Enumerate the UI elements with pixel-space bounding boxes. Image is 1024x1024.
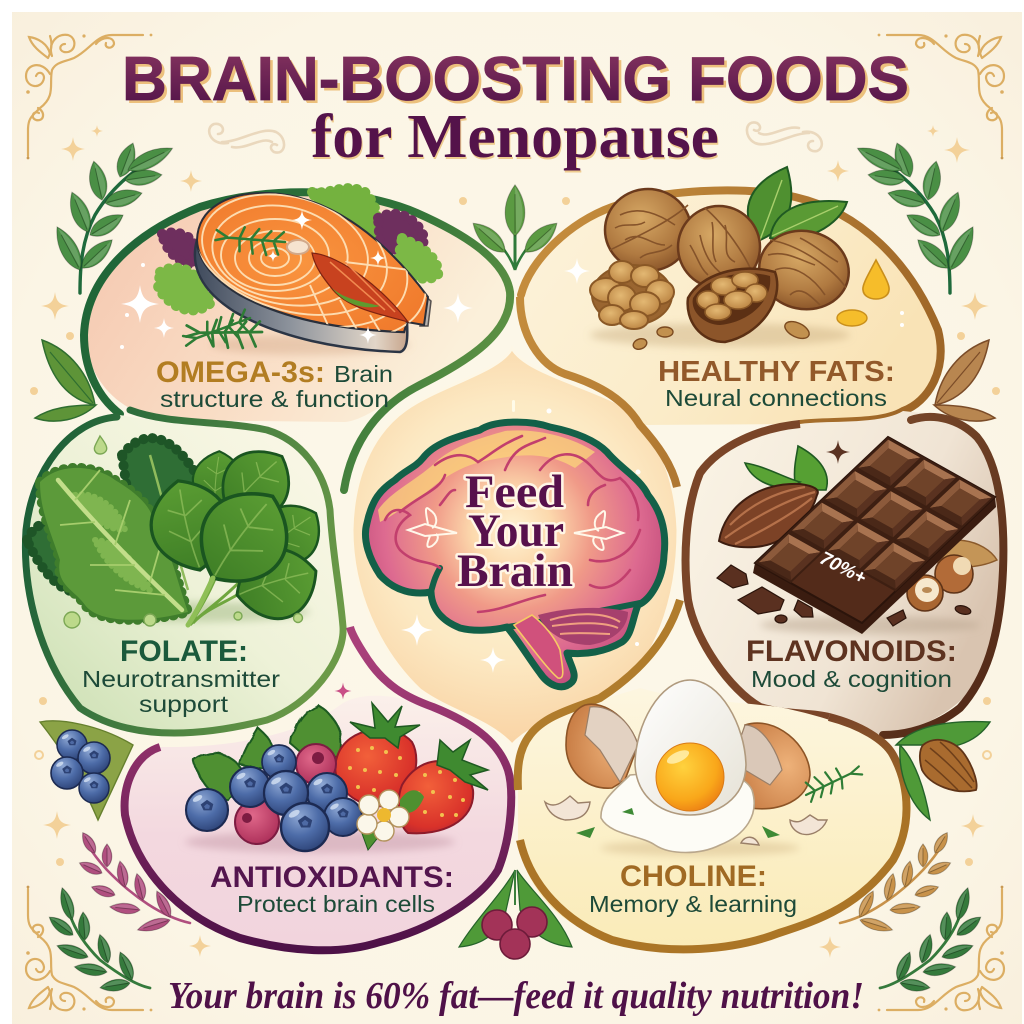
label: antioxidants: Protect brain cells bbox=[237, 891, 435, 917]
brain caption: Brain bbox=[457, 545, 573, 597]
spinach stems bbox=[190, 515, 262, 625]
label: omega-3s: structure & function bbox=[160, 386, 389, 412]
brain caption: Feed bbox=[465, 466, 564, 518]
title: for Menopause bbox=[311, 103, 719, 171]
icon: red berries with leaves bbox=[459, 870, 572, 959]
spinach leaves bbox=[190, 449, 246, 513]
label: flavonoids: FLAVONOIDS: bbox=[746, 635, 957, 668]
kale leaves bbox=[27, 438, 198, 620]
oil drop bbox=[863, 260, 889, 299]
icon: salmon steak bbox=[153, 183, 444, 358]
label: folate: Neurotransmitter bbox=[82, 666, 280, 692]
label: flavonoids bbox=[746, 635, 957, 692]
flourishes bbox=[408, 508, 623, 550]
icon: kale and spinach bbox=[27, 434, 334, 628]
panel: folate bbox=[25, 410, 343, 733]
egg white bbox=[601, 770, 754, 852]
tagline: Your brain is 60% fat—feed it quality nutrition! bbox=[168, 975, 864, 1017]
panel sparkles bbox=[120, 258, 904, 349]
70% label: 70%+ bbox=[816, 548, 869, 589]
pink sparkle bbox=[334, 682, 352, 700]
label: choline bbox=[589, 860, 797, 917]
icon: almond with leaves bbox=[896, 722, 990, 820]
label: omega-3s: OMEGA-3s: bbox=[156, 356, 325, 389]
halved walnut meat bbox=[697, 272, 767, 320]
panel: antioxidants bbox=[125, 627, 511, 950]
blueberries bbox=[186, 745, 362, 851]
herbs bbox=[576, 764, 865, 838]
icon: blueberry cluster bbox=[40, 721, 133, 820]
panel: flavonoids bbox=[686, 411, 1003, 735]
label: antioxidants: ANTIOXIDANTS: bbox=[210, 861, 454, 894]
corner ornament: bottom right bbox=[878, 886, 1004, 1011]
title: BRAIN-BOOSTING FOODS bbox=[125, 48, 912, 117]
brain highlights bbox=[378, 430, 595, 522]
icon: chocolate bar bbox=[717, 437, 997, 634]
label: antioxidants bbox=[210, 861, 454, 917]
right shell bbox=[735, 723, 810, 809]
raspberries bbox=[235, 744, 336, 844]
label: choline: CHOLINE: bbox=[620, 860, 767, 893]
panel: healthy fats bbox=[520, 190, 942, 487]
strawberry leaves bbox=[194, 705, 341, 800]
oil pool bbox=[837, 310, 867, 326]
corner ornament: top left bbox=[26, 34, 152, 159]
crumbs bbox=[632, 318, 812, 351]
water drops bbox=[64, 436, 302, 628]
title: BRAIN-BOOSTING FOODS bbox=[122, 45, 909, 114]
label: healthy fats bbox=[658, 356, 895, 411]
panel: choline bbox=[518, 600, 907, 950]
panel: center brain area bbox=[352, 348, 678, 745]
hazelnuts and leaf bbox=[907, 540, 997, 611]
flower bbox=[357, 790, 424, 850]
title swirl: left bbox=[209, 124, 284, 153]
brain caption: Your bbox=[468, 505, 564, 557]
brain folds bbox=[385, 436, 640, 612]
walnut kernel bbox=[590, 261, 674, 329]
corner ornament: top right bbox=[878, 34, 1004, 159]
label: folate: support bbox=[139, 691, 229, 717]
corner ornament: bottom left bbox=[26, 886, 152, 1011]
icon: walnuts bbox=[590, 167, 889, 351]
brain caption bbox=[457, 466, 573, 597]
label: flavonoids: Mood & cognition bbox=[751, 666, 952, 692]
lobe separation bbox=[431, 568, 640, 627]
label: folate bbox=[82, 635, 280, 717]
yolk bbox=[656, 743, 724, 811]
lettuce garnish bbox=[158, 188, 438, 310]
label: healthy fats: Neural connections bbox=[665, 385, 887, 411]
icon: cracked egg bbox=[545, 680, 865, 856]
chocolate crumbs bbox=[717, 565, 972, 626]
icon: brain bbox=[365, 422, 665, 687]
leaf branches bbox=[35, 140, 995, 993]
green leaves bbox=[748, 167, 847, 240]
shell fragments bbox=[545, 796, 827, 845]
cerebellum bbox=[538, 608, 628, 645]
label: folate: FOLATE: bbox=[120, 635, 248, 668]
label: choline: Memory & learning bbox=[589, 891, 797, 917]
icon: berries bbox=[185, 703, 488, 853]
left shell bbox=[566, 704, 638, 788]
title swirl: right bbox=[747, 122, 822, 151]
chocolate squares bbox=[755, 437, 995, 592]
title: for Menopause bbox=[312, 105, 720, 173]
decorative sparkles bbox=[30, 125, 1000, 958]
brain stem bbox=[514, 615, 563, 678]
cocoa pod bbox=[719, 446, 827, 547]
label: healthy fats: HEALTHY FATS: bbox=[658, 356, 895, 388]
label: omega-3s bbox=[156, 356, 393, 412]
label: omega-3s: Brain bbox=[334, 361, 393, 387]
panel: omega-3s bbox=[84, 192, 510, 490]
strawberries bbox=[335, 703, 488, 833]
title bbox=[122, 45, 912, 173]
center sparkles bbox=[401, 400, 640, 673]
